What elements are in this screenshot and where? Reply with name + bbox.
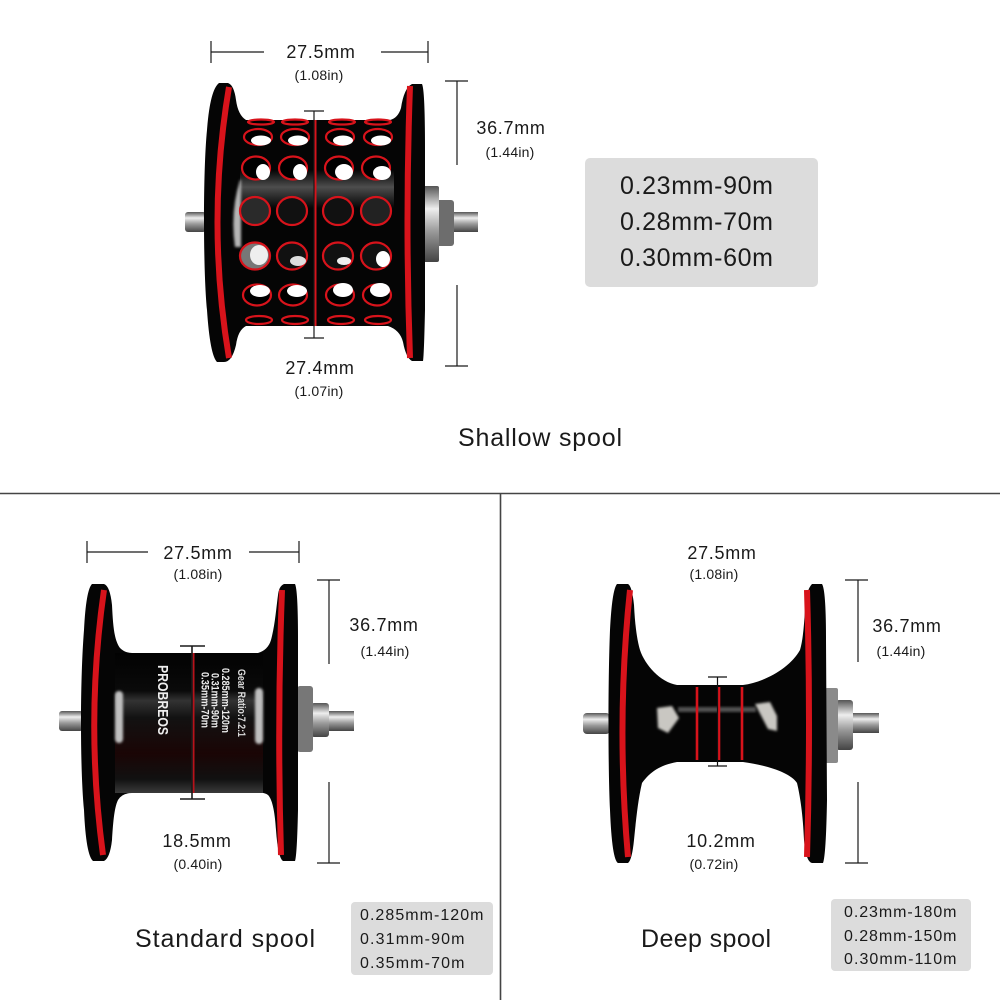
capacity box: 0.31mm-90m [360, 931, 465, 948]
width label: 27.5mm [163, 543, 233, 563]
width label inches: (1.08in) [689, 566, 739, 582]
right hub and shaft [825, 688, 879, 763]
height label inches: (1.44in) [485, 144, 535, 160]
left axle [583, 713, 610, 734]
capacity box: 0.35mm-70m [360, 955, 465, 972]
dimension lines [87, 541, 340, 863]
flange red stripes [94, 590, 282, 855]
drum label: 27.4mm [285, 358, 355, 378]
right hub and shaft [423, 186, 478, 262]
drum edge highlight [233, 180, 241, 247]
satin band on drum [678, 707, 756, 712]
center red groove [314, 120, 316, 326]
left axle [59, 711, 83, 731]
capacity box: 0.30mm-60m [620, 244, 774, 272]
dimension lines [708, 580, 868, 863]
dimension lines [211, 41, 468, 366]
drum label inches: (1.07in) [294, 383, 344, 399]
capacity box [831, 899, 971, 971]
width label: 27.5mm [286, 42, 356, 62]
capacity box: 0.28mm-150m [844, 928, 957, 945]
satin band on drum [240, 170, 394, 208]
heading: shallow spool: Shallow spool [458, 424, 623, 452]
dividers [0, 493, 1000, 1000]
drum edge highlights [115, 688, 263, 744]
right hub and shaft [297, 686, 354, 752]
capacity box [585, 158, 818, 287]
height label: 36.7mm [349, 615, 419, 635]
drum label inches: (0.40in) [173, 856, 223, 872]
width label: 27.5mm [687, 543, 757, 563]
capacity box [351, 902, 493, 975]
spec text on drum: 0.285mm-120m [219, 668, 231, 733]
spec text on drum: 0.35mm-70m [198, 672, 210, 728]
heading: deep spool: Deep spool [641, 925, 772, 953]
spool body silhouette [204, 83, 425, 362]
height label: 36.7mm [872, 616, 942, 636]
capacity box: 0.28mm-70m [620, 208, 774, 236]
panel: standard spool [59, 541, 493, 975]
gloss highlights [657, 702, 777, 733]
spool photo: deep [583, 584, 879, 863]
panel: shallow spool [185, 41, 818, 452]
height label inches: (1.44in) [360, 643, 410, 659]
brand text on drum: PROBREOS [154, 665, 170, 735]
capacity box: 0.285mm-120m [360, 907, 484, 924]
capacity box: 0.30mm-110m [844, 951, 957, 968]
capacity box: 0.23mm-180m [844, 904, 957, 921]
center red groove [192, 653, 194, 793]
drum finish [115, 653, 263, 793]
spec text on drum: 0.31mm-90m [208, 673, 220, 728]
drum label: 18.5mm [162, 831, 232, 851]
height label: 36.7mm [476, 118, 546, 138]
spec text on drum [198, 668, 247, 737]
width label inches: (1.08in) [173, 566, 223, 582]
width label inches: (1.08in) [294, 67, 344, 83]
spool body silhouette [81, 584, 298, 861]
perforation holes [240, 120, 392, 324]
spool body silhouette [608, 584, 827, 863]
flange red stripes [218, 86, 410, 358]
spec text on drum: Gear Ratio:7.2:1 [235, 669, 247, 737]
spool photo: shallow [185, 83, 478, 362]
panel: deep spool [583, 543, 971, 971]
capacity box: 0.23mm-90m [620, 172, 774, 200]
center red rings [697, 687, 742, 760]
drum label: 10.2mm [686, 831, 756, 851]
drum label inches: (0.72in) [689, 856, 739, 872]
flange red stripes [622, 590, 809, 857]
spool photo: standard [59, 584, 354, 861]
heading: standard spool: Standard spool [135, 925, 316, 953]
height label inches: (1.44in) [876, 643, 926, 659]
left axle [185, 212, 206, 232]
